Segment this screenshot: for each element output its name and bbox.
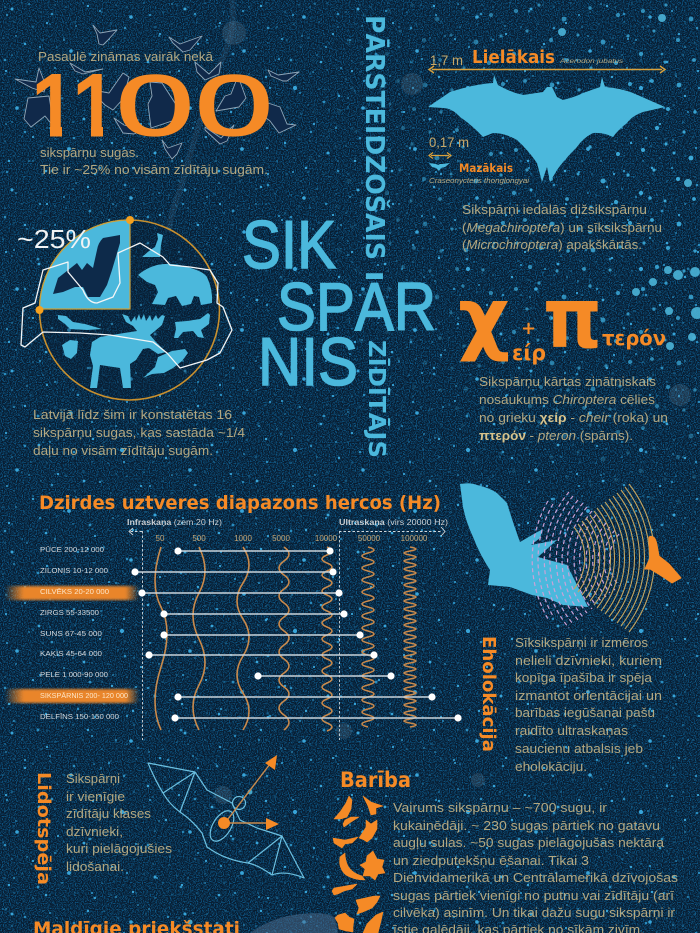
row labels: ZILONIS 10-12 000 (40, 566, 108, 575)
echolocation text: barības iegūšanai pašu (515, 705, 655, 720)
echolocation text: raidīto ultraskaņas (515, 723, 629, 738)
Latvia species text: daļu no visām zīdītāju sugām. (33, 443, 213, 458)
hearing range chart: Ultraskaņa (virs 20000 Hz) (339, 518, 448, 527)
species text: sikspārņu sugas. (40, 145, 139, 160)
big number 1100 (36, 74, 269, 137)
Latvia species text: Latvijā līdz šim ir konstatētas 16 (33, 407, 232, 422)
sound waves (155, 547, 416, 731)
suborders text: (Megachiroptera ) un sīksikspārņu (462, 220, 662, 235)
echolocation text: eholokāciju. (515, 759, 587, 774)
icon: moth (645, 536, 681, 583)
sound arcs outgoing (574, 484, 655, 632)
size comparison: Craseonycteris thonglongyai (429, 178, 530, 185)
row labels: PŪCE 200-12 000 (40, 545, 104, 554)
hearing range chart (5, 518, 462, 740)
flight text: dzīvnieki, (66, 824, 123, 839)
icon: large bat (428, 75, 665, 182)
row labels: CILVĒKS 20-20 000 (40, 587, 109, 596)
arrows (225, 764, 270, 823)
flight text: Sikspārņi (66, 771, 120, 786)
main title: SPĀR (277, 269, 436, 345)
chart: circle with quarter and animals over Latvia outline (17, 216, 232, 400)
echolocation heading: Eholokācija (478, 636, 499, 752)
grey blob at bottom (250, 913, 338, 933)
arrow: small span (429, 152, 451, 158)
food text (393, 800, 679, 933)
scale captions: Infraskaņa (zem 20 Hz) (127, 518, 222, 527)
center of gravity dot (218, 817, 230, 829)
echo arcs returning (532, 492, 619, 628)
frequency labels: 100000 (401, 534, 428, 543)
frequency labels: 500 (192, 534, 206, 543)
etymology text (479, 374, 668, 443)
vertical subtitle: ZĪDĪTĀJS (363, 340, 391, 458)
big number 1100: 0 (195, 58, 273, 154)
main title: NIS (258, 324, 358, 400)
echolocation text: saucienu atbalsis jeb (515, 741, 643, 756)
hearing range heading: Dzirdes uztveres diapazons hercos (Hz) (39, 492, 441, 514)
suborders text (462, 202, 662, 252)
food text: kukaiņēdāji. ~ 230 sugas pārtiek no gatavu (393, 818, 660, 833)
species text (40, 145, 268, 177)
size comparison (428, 47, 665, 185)
row labels (40, 545, 128, 721)
flight text: lidošanai. (66, 859, 124, 874)
big number 1100: 0 (116, 58, 194, 154)
frequency labels: 1000 (234, 534, 252, 543)
quarter segment (40, 220, 130, 309)
echolocation text: kopīga īpašība ir spēja (515, 670, 653, 685)
species text: Tie ir ~25% no visām zīdītāju sugām. (40, 162, 268, 177)
food text: augļu sulas. ~50 sugas pielāgojušās nektāra (393, 835, 665, 850)
echolocation illustration (460, 483, 681, 632)
flight heading: Lidotspēja (33, 772, 54, 885)
label: 25 percent: ~25% (17, 224, 91, 254)
icon: bat in quarter (53, 235, 120, 297)
intro text: world species (36, 52, 269, 137)
greek word graphic (458, 269, 666, 367)
range lines (131, 547, 462, 722)
frequency labels: 50 (156, 534, 165, 543)
food icons (332, 796, 385, 933)
frequency labels (156, 534, 428, 543)
vertical subtitle: PĀRSTEIDZOŠAIS (359, 15, 391, 260)
arrow: large span (429, 66, 665, 73)
suborders text: Sikspārņi iedalās dižsikspārņu (462, 202, 647, 217)
big number 1100: 1 (71, 58, 119, 154)
food heading: Barība (340, 768, 411, 792)
greek word graphic: π (543, 269, 602, 367)
echolocation text: izmantot orientācijai un (515, 688, 662, 703)
size comparison: 0,17 m (429, 134, 469, 150)
bat outlines behind the number (15, 25, 299, 159)
Latvia outline (21, 243, 232, 368)
frequency labels: 5000 (272, 534, 290, 543)
Latvia species text: sikspārņu sugas, kas sastāda ~1/4 (33, 425, 245, 440)
main title: SIK (242, 207, 336, 283)
etymology text: Sikspārņu kārtas zinātniskais (479, 374, 657, 389)
greek word graphic: τερόν (602, 326, 666, 350)
food text: Vairums sikspārņu – ~700 sugu, ir (393, 800, 608, 815)
size comparison: Lielākais (472, 47, 555, 68)
etymology text: no grieku χείρ - cheir (roka) un (479, 410, 668, 425)
greek word graphic: χ (458, 271, 510, 364)
echolocation text (515, 635, 662, 774)
flight text: zīdītāju klases (66, 806, 152, 821)
etymology text: πτερόν - pteron (spārns). (479, 428, 633, 443)
icon: flying bat (460, 483, 588, 607)
frequency labels: 50000 (358, 534, 381, 543)
flight text: kuri pielāgojušies (66, 841, 173, 856)
row labels: ZIRGS 55-33500 (40, 608, 99, 617)
size comparison: Mazākais (459, 161, 513, 175)
flight diagram: bat skeleton outline with force arrows (148, 755, 304, 878)
big number 1100: 1 (30, 58, 78, 154)
frequency labels: 10000 (315, 534, 338, 543)
food text: cilvēka) asinīm. Un tikai dažu sugu sikspārņi ir (393, 905, 676, 920)
row labels: DELFĪNS 150-150 000 (40, 712, 119, 721)
intro text: world species: Pasaulē zināmas vairāk nekā (38, 49, 214, 64)
food text: Dienvidamerikā un Centrālamerikā dzīvojošas (393, 870, 679, 885)
greek word graphic: είρ (512, 341, 546, 365)
row labels: PELE 1 000-90 000 (40, 670, 108, 679)
flight text: ir vienīgie (66, 789, 125, 804)
echolocation text: nelieli dzīvnieki, kuriem (515, 653, 662, 668)
size comparison: Acerodon jubatus (559, 58, 624, 65)
flight text (66, 771, 173, 874)
row labels: KAĶIS 45-64 000 (40, 649, 102, 658)
Latvia species text (33, 407, 245, 458)
food text: sugas pārtiek vienīgi no putnu vai zīdītāju (arī (393, 888, 674, 903)
echolocation text: Sīksikspārņi ir izmēros (515, 635, 649, 650)
main title (242, 207, 436, 400)
row labels: SIKSPĀRNIS 200- 120 000 (40, 691, 128, 700)
scale boundaries (129, 527, 445, 740)
size comparison: 1,7 m (430, 52, 463, 68)
row labels: SUNS 67-45 000 (40, 629, 102, 638)
vertical subtitle (359, 15, 391, 458)
etymology text: nosaukums Chiroptera cēlies (479, 392, 656, 407)
food text: un ziedputekšņu ēšanai. Tikai 3 (393, 853, 589, 868)
suborders text: (Microchiroptera) apakškārtās. (462, 237, 642, 252)
greek word graphic: + (521, 318, 536, 339)
icon: animals (58, 233, 212, 388)
icon: small bat (429, 163, 450, 171)
dots on the circle (126, 216, 134, 224)
highlight bars (5, 586, 139, 703)
